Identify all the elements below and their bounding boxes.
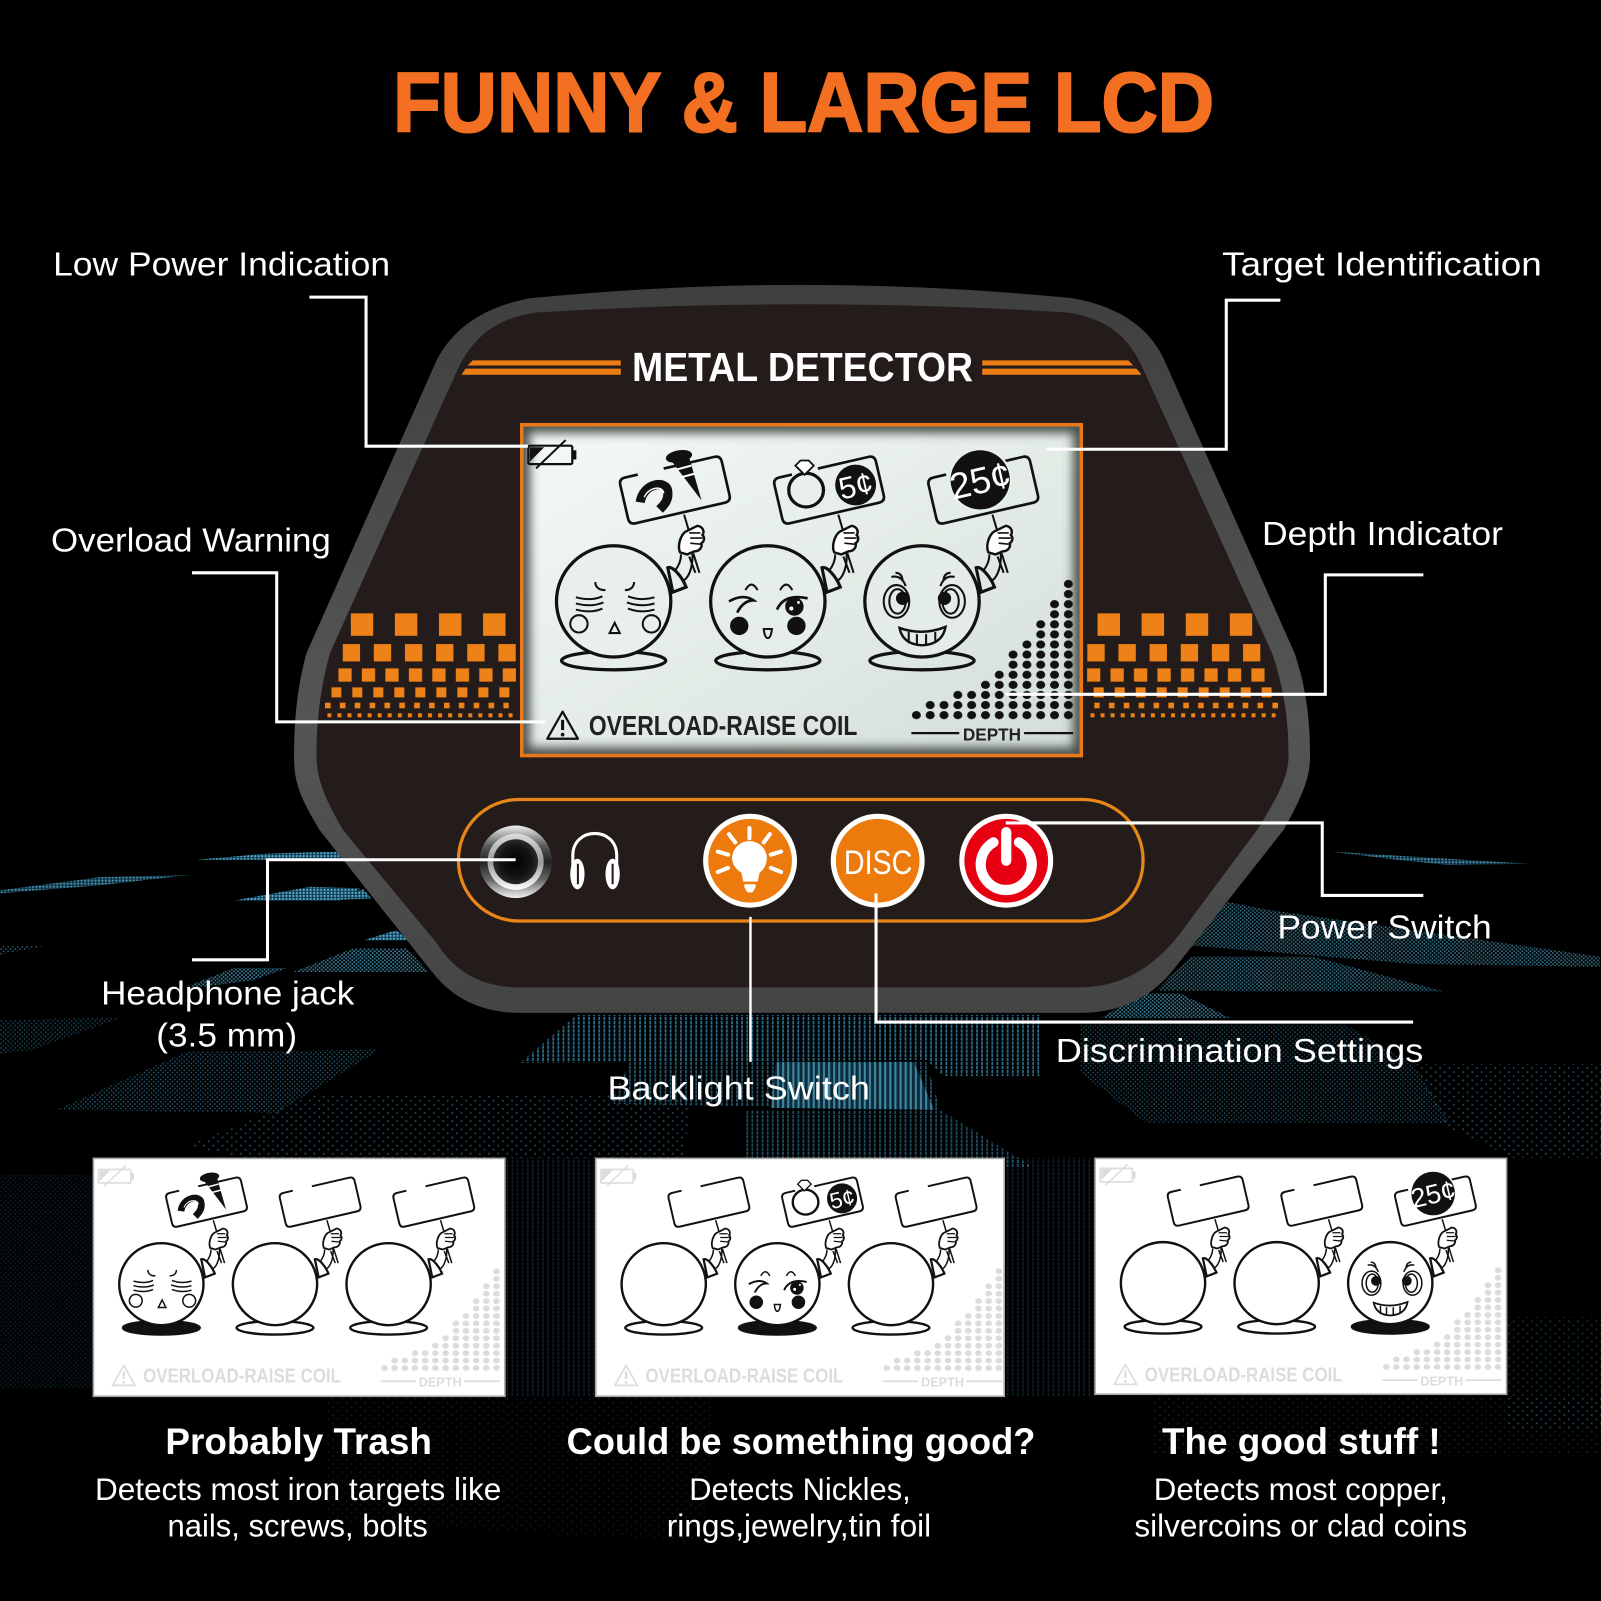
character: good stuff: 25¢ [946, 454, 1015, 508]
caption: the good stuff: silvercoins or clad coins [1134, 1508, 1467, 1544]
headphone jack [479, 826, 552, 898]
character: maybe good: 5¢ [835, 466, 876, 507]
caption: probably trash: Detects most iron targets like [95, 1471, 501, 1507]
icon: low battery [528, 440, 1073, 739]
caption: probably trash: Probably Trash [165, 1421, 432, 1462]
callout: discrimination settings [876, 893, 1423, 1070]
callout: headphone jack: Headphone jack [101, 976, 354, 1013]
callout: backlight switch: Backlight Switch [608, 1071, 870, 1108]
speaker squares left [325, 613, 516, 717]
panel: something good screen: OVERLOAD-RAISE COIL [645, 1366, 843, 1388]
device heading: METAL DETECTOR [632, 344, 973, 390]
panel: good stuff screen: DEPTH [1420, 1373, 1463, 1388]
icon: headphones [570, 833, 620, 889]
character: good stuff [865, 448, 1039, 670]
control panel outline [458, 799, 1143, 921]
callout: low power: Low Power Indication [53, 247, 390, 284]
caption: the good stuff: The good stuff ! [1162, 1421, 1441, 1462]
speaker squares right [1087, 613, 1278, 717]
callout: power switch [1006, 823, 1492, 946]
panel: probably trash screen: DEPTH [419, 1375, 462, 1390]
caption: could be something good: Detects Nickles, [689, 1471, 911, 1507]
depth gauge [909, 579, 1075, 720]
callout: low power [53, 247, 528, 446]
orange stripes [462, 360, 1142, 375]
caption: the good stuff: Detects most copper, [1154, 1471, 1448, 1507]
callout: headphone jack: (3.5 mm) [156, 1018, 297, 1055]
caption: the good stuff [1134, 1421, 1467, 1544]
device face [317, 304, 1289, 987]
depth label: DEPTH [963, 724, 1021, 744]
power button [959, 814, 1053, 908]
callout: depth indicator [1006, 516, 1503, 694]
panel: something good screen: 5¢ [827, 1184, 857, 1214]
panel: good stuff screen: OVERLOAD-RAISE COIL [1145, 1365, 1343, 1387]
callout: discrimination settings: Discrimination Settings [1056, 1033, 1423, 1070]
panel: good stuff screen: 25¢ [1408, 1174, 1459, 1214]
disc button [831, 814, 925, 908]
caption: could be something good: Could be something good? [567, 1421, 1035, 1462]
callout: depth indicator: Depth Indicator [1262, 516, 1503, 553]
callout: target identification: Target Identification [1222, 247, 1542, 284]
callout: power switch: Power Switch [1277, 909, 1492, 946]
character: maybe good [711, 456, 885, 670]
panel: probably trash screen [93, 1158, 505, 1396]
callout: headphone jack [101, 860, 516, 1055]
panel: probably trash screen: OVERLOAD-RAISE COIL [143, 1366, 341, 1388]
title: FUNNY & LARGE LCD [393, 55, 1214, 150]
panel: something good screen: DEPTH [921, 1375, 964, 1390]
caption: probably trash [95, 1421, 501, 1544]
caption: could be something good: rings,jewelry,tin foil [667, 1508, 931, 1544]
panel: something good screen [596, 1158, 1004, 1396]
callout: target identification [1047, 247, 1542, 449]
overload text: OVERLOAD-RAISE COIL [589, 710, 857, 741]
background: dotted teal perspective grid [0, 852, 1601, 1542]
caption: probably trash: nails, screws, bolts [167, 1508, 428, 1544]
callout: overload warning [51, 522, 545, 722]
panel: good stuff screen [1095, 1158, 1507, 1394]
callout: overload warning: Overload Warning [51, 522, 331, 559]
character: trash [556, 448, 731, 670]
metal detector control box [294, 285, 1310, 1013]
caption: could be something good [567, 1421, 1035, 1544]
LCD screen [522, 425, 1081, 756]
disc button: DISC [844, 844, 912, 882]
device shell [294, 285, 1310, 1013]
backlight button [703, 814, 797, 908]
